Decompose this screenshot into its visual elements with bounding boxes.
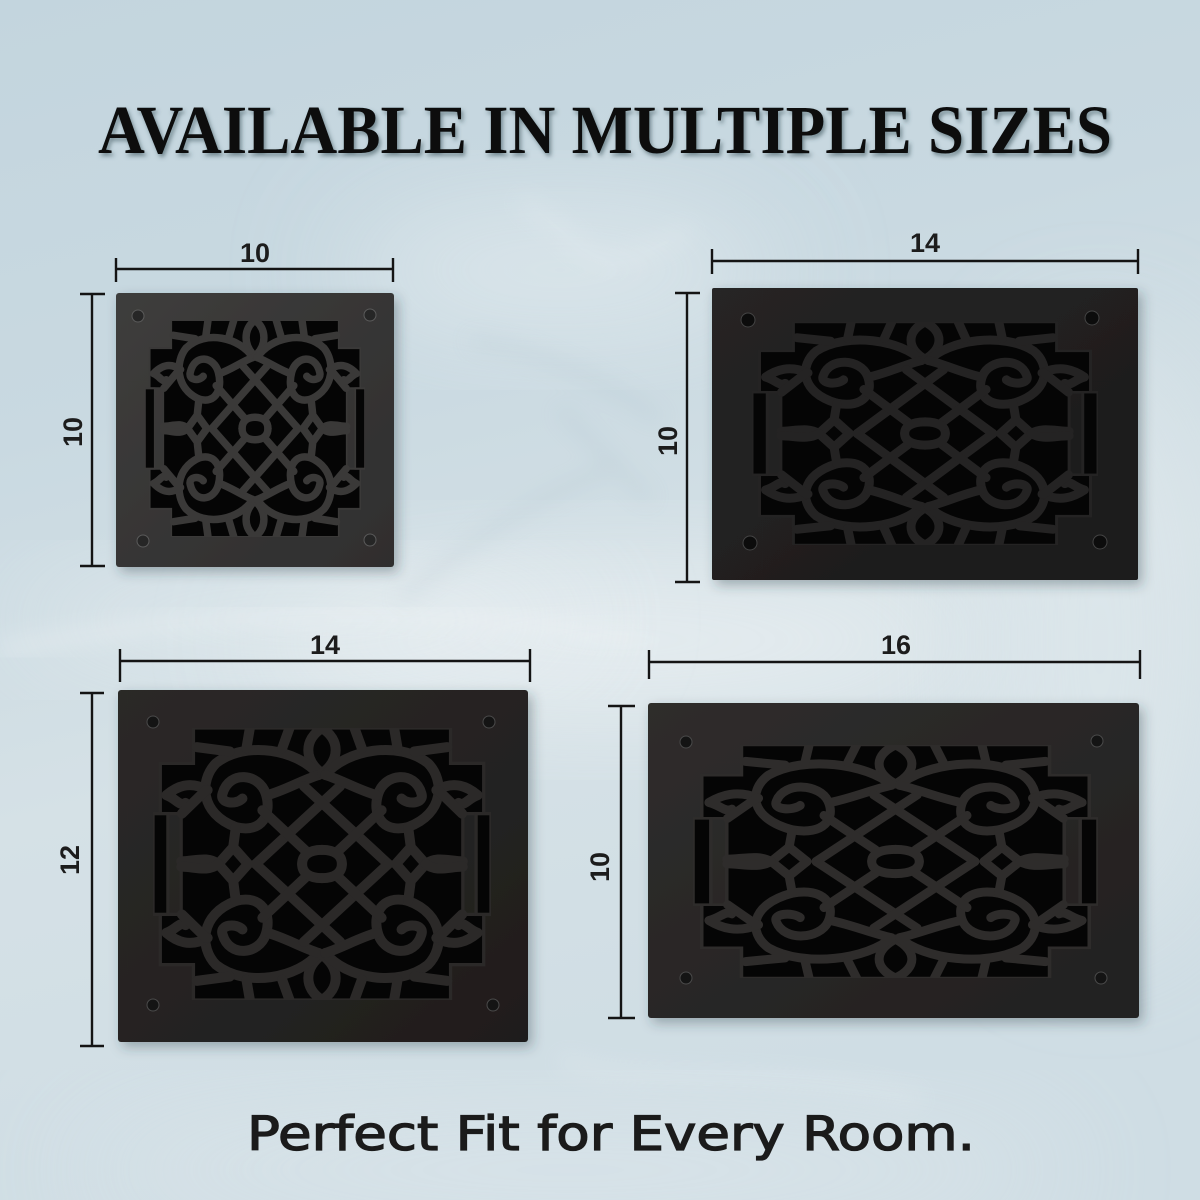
screws xyxy=(741,311,1107,550)
dimension: 10 height, second vent xyxy=(653,293,700,582)
vent 14 x 10 xyxy=(712,288,1138,580)
dimension: 14 width, third vent: 14 xyxy=(310,630,340,660)
dimension: 10 height, fourth vent xyxy=(585,706,635,1018)
grille plate xyxy=(118,690,528,1042)
dimension: 10 height, fourth vent: 10 xyxy=(585,852,615,882)
grille pattern xyxy=(693,745,1098,978)
dimension: 16 width xyxy=(649,630,1140,679)
dimension: 12 height: 12 xyxy=(55,845,85,875)
dimension: 10 width: 10 xyxy=(240,238,270,268)
dimension: 10 width xyxy=(116,238,393,282)
grille pattern xyxy=(145,320,365,537)
screws xyxy=(147,716,499,1011)
dimension: 16 width: 16 xyxy=(881,630,911,660)
grille plate xyxy=(116,293,394,567)
dimension: 10 height, second vent: 10 xyxy=(653,426,683,456)
vent 16 x 10 xyxy=(648,703,1139,1018)
grille plate xyxy=(648,703,1139,1018)
tagline: Perfect Fit for Every Room. xyxy=(247,1107,975,1162)
dimension: 12 height xyxy=(55,693,104,1046)
grille pattern xyxy=(153,728,491,1000)
title: AVAILABLE IN MULTIPLE SIZES xyxy=(98,92,1112,168)
vent 14 x 12 xyxy=(118,690,528,1042)
grille pattern xyxy=(752,322,1098,545)
vent 10 x 10 xyxy=(116,293,394,567)
dimension: 14 width: 14 xyxy=(910,228,940,258)
dimension: 14 width, third vent xyxy=(120,630,530,682)
dimension: 14 width xyxy=(712,228,1138,274)
screws xyxy=(680,735,1107,984)
dimension: 10 height: 10 xyxy=(58,417,88,447)
dimension: 10 height xyxy=(58,294,105,566)
screws xyxy=(132,309,376,547)
grille plate xyxy=(712,288,1138,580)
